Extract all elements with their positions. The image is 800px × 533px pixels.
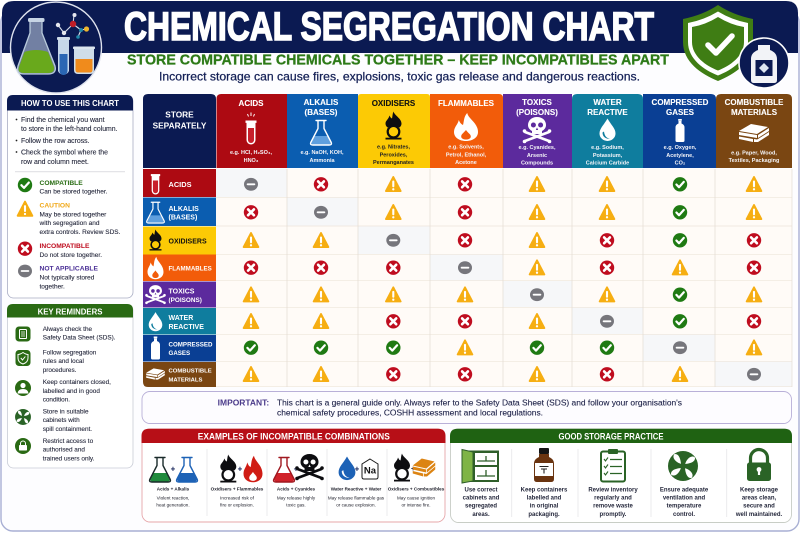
column: acids <box>216 94 287 168</box>
legend: compatible: Can be stored together. <box>40 188 108 196</box>
practice: cabinets: cabinets and <box>463 495 500 501</box>
icon: safety shield and bottle <box>683 5 789 88</box>
column: flammables: Acetone <box>455 160 477 166</box>
column: oxidisers: Permanganates <box>373 160 414 166</box>
instructions: row and column meet. <box>21 159 89 166</box>
column: toxics: Arsenic <box>527 153 547 159</box>
practice: cabinets: Use correct <box>464 487 498 493</box>
row: compressed gases: GASES <box>168 350 190 357</box>
row: water reactive: REACTIVE <box>168 324 204 331</box>
column: alkalis: Ammonia <box>309 158 335 164</box>
example: water reactive and water: or cause explosion. <box>336 502 376 507</box>
example: acids and cyanides <box>274 454 324 507</box>
reminder: keep containers closed: labelled and in good <box>43 388 100 395</box>
example: oxidisers and flammables: Oxidisers + Flammables <box>211 487 264 492</box>
reminder: restrict access: trained users only. <box>43 456 95 462</box>
row: combustible materials <box>143 362 761 387</box>
instructions: Find the chemical you want <box>21 117 105 124</box>
heading: how to use <box>7 95 133 110</box>
legend: not applicable: together. <box>40 284 65 290</box>
column: alkalis: ALKALIS <box>304 98 339 107</box>
practice: labelled containers <box>521 448 568 518</box>
example: oxidisers and combustibles: or intense fire. <box>401 502 431 507</box>
example: oxidisers and combustibles: + <box>411 466 415 473</box>
row: acids: ACIDS <box>168 180 192 189</box>
callout: important note: IMPORTANT: <box>218 397 269 407</box>
column: combustible materials: COMBUSTIBLE <box>725 98 784 107</box>
callout: important note: chemical safety procedures, COSHH assessment and local regulations. <box>277 408 543 417</box>
example: oxidisers and flammables: fire or explosion. <box>220 502 254 507</box>
reminder: segregation rules: rules and local <box>43 358 84 365</box>
matrix background and grid <box>216 169 792 387</box>
row: toxics: (POISONS) <box>168 297 202 304</box>
practice: labelled containers: packaging. <box>528 512 560 518</box>
column: acids: e.g. HCl, H₂SO₄, <box>230 150 272 156</box>
legend: caution: May be stored together <box>40 211 107 218</box>
practice: inventory clipboard: promptly. <box>600 512 627 518</box>
heading: examples: EXAMPLES OF INCOMPATIBLE COMBINATIONS <box>198 432 390 442</box>
panel: examples of incompatible combinations <box>142 429 446 522</box>
reminder: suitable cabinets: spill containment. <box>43 426 92 433</box>
reminder: segregation rules: procedures. <box>43 367 77 374</box>
reminder: keep containers closed <box>15 379 111 404</box>
example: acids and cyanides: + <box>294 464 299 474</box>
example: oxidisers and combustibles: Oxidisers + Combustibles <box>388 487 445 492</box>
reminder: safety data sheet: Always check the <box>43 326 93 333</box>
practice: inventory clipboard: remove waste <box>593 503 634 509</box>
instructions: to store in the left-hand column. <box>21 126 118 133</box>
header band <box>2 1 798 53</box>
row: oxidisers: OXIDISERS <box>168 238 207 245</box>
column: water reactive: Calcium Carbide <box>586 160 629 166</box>
practice: secure storage: secure and <box>743 503 775 509</box>
example: oxidisers and flammables <box>211 454 264 507</box>
callout: important note: This chart is a general guide only. Always refer to the Safety Data Sheet (SDS) and follow your organisation's <box>277 398 682 407</box>
practice: labelled containers: Keep containers <box>521 487 568 493</box>
row: flammables <box>143 254 761 281</box>
column: flammables: e.g. Solvents, <box>448 144 484 150</box>
heading: key reminders: KEY REMINDERS <box>38 308 102 316</box>
column: combustible materials <box>716 94 792 168</box>
practice: labelled containers: in original <box>530 503 559 509</box>
legend: compatible: COMPATIBLE <box>40 180 83 187</box>
example: acids and alkalis <box>150 458 197 507</box>
practice: inventory clipboard: Review inventory <box>588 487 638 493</box>
column: water reactive: WATER <box>593 98 622 107</box>
row: alkalis: ALKALIS <box>168 206 199 213</box>
row: compressed gases: COMPRESSED <box>168 342 213 349</box>
column: toxics: Compounds <box>521 160 553 166</box>
column: compressed gases: Acetylene, <box>666 153 694 159</box>
reminder: suitable cabinets <box>15 408 92 433</box>
reminder: restrict access: authorised and <box>43 446 85 454</box>
row: alkalis: (BASES) <box>168 214 197 222</box>
column: combustible materials: Textiles, Packaging <box>729 158 779 164</box>
column: acids: HNO₃ <box>244 158 259 164</box>
heading: examples <box>142 429 446 443</box>
column: combustible materials: MATERIALS <box>731 108 778 117</box>
example: water reactive and water <box>328 456 385 507</box>
column: compressed gases: e.g. Oxygen, <box>664 145 697 151</box>
practice: ventilation: Ensure adequate <box>660 487 709 493</box>
column: oxidisers <box>358 94 430 168</box>
example: acids and cyanides: Acids + Cyanides <box>277 487 316 492</box>
practice: labelled containers: labelled and <box>527 495 562 501</box>
legend: caution: CAUTION <box>40 202 70 210</box>
example: water reactive and water: Water Reactive + Water <box>331 487 382 492</box>
panel: how to use this chart <box>7 95 133 298</box>
reminder: suitable cabinets: cabinets with <box>43 417 80 424</box>
reminder: keep containers closed: Keep containers closed, <box>43 379 111 386</box>
example: oxidisers and combustibles <box>388 454 445 507</box>
column: combustible materials: e.g. Paper, Wood, <box>731 150 777 156</box>
legend: not applicable: Not typically stored <box>40 274 95 282</box>
row: acids <box>143 169 761 197</box>
tagline: Incorrect storage can cause fires, explosions, toxic gas release and dangerous reactions. <box>159 70 640 84</box>
practice: ventilation: ventilation and <box>663 495 706 501</box>
reminder: restrict access <box>15 438 95 462</box>
column: water reactive: REACTIVE <box>587 108 628 117</box>
practice: secure storage: well maintained. <box>735 512 782 518</box>
reminder: segregation rules: Follow segregation <box>43 350 97 356</box>
column: flammables: Petrol, Ethanol, <box>446 152 487 158</box>
column: toxics: e.g. Cyanides, <box>518 145 556 151</box>
practice: cabinets <box>462 450 500 518</box>
reminder: suitable cabinets: Store in suitable <box>43 408 89 416</box>
practice: secure storage <box>735 450 782 518</box>
reminder: restrict access: Restrict access to <box>43 438 94 445</box>
instructions: Check the symbol where the <box>21 150 108 156</box>
heading: how to use: HOW TO USE THIS CHART <box>21 98 120 108</box>
column: flammables <box>430 94 503 168</box>
practice: cabinets: segregated <box>465 503 497 509</box>
column: alkalis: e.g. NaOH, KOH, <box>300 150 344 156</box>
example: acids and alkalis: Violent reaction, <box>157 495 189 500</box>
legend: caution: with segregation and <box>38 220 100 227</box>
panel: good storage practice <box>450 429 792 522</box>
example: acids and cyanides: May release highly <box>277 495 316 500</box>
example: acids and alkalis: heat generation. <box>156 502 190 507</box>
heading: key reminders <box>7 304 133 318</box>
column: alkalis: (BASES) <box>305 108 338 117</box>
practice: cabinets: areas. <box>472 512 490 518</box>
legend: incompatible: Do not store together. <box>40 252 102 259</box>
subtitle: STORE COMPATIBLE CHEMICALS TOGETHER – KEEP INCOMPATIBLES APART <box>127 52 669 68</box>
column: toxics: TOXICS <box>522 98 552 107</box>
column: oxidisers: e.g. Nitrates, <box>377 144 410 150</box>
example: water reactive and water: + <box>355 464 360 474</box>
callout: important note <box>142 392 792 424</box>
heading: good storage: GOOD STORAGE PRACTICE <box>558 432 664 442</box>
column: toxics <box>503 94 572 168</box>
practice: secure storage: Keep storage <box>740 487 779 493</box>
practice: secure storage: areas clean, <box>742 495 777 501</box>
panel: key reminders <box>7 304 133 468</box>
row: oxidisers <box>143 226 761 254</box>
column: water reactive <box>572 94 643 168</box>
legend: compatible <box>18 178 108 196</box>
row: compressed gases <box>143 335 761 362</box>
column: oxidisers: OXIDISERS <box>372 99 416 108</box>
title: CHEMICAL SEGREGATION CHART <box>124 5 654 49</box>
reminder: segregation rules <box>16 350 97 374</box>
legend: not applicable <box>18 265 98 290</box>
example: acids and alkalis: Acids + Alkalis <box>157 487 190 492</box>
column: compressed gases: COMPRESSED <box>652 98 709 107</box>
legend: not applicable: NOT APPLICABLE <box>40 266 98 272</box>
column: oxidisers: Peroxides, <box>380 152 408 158</box>
header: store separately <box>143 94 216 168</box>
column: compressed gases <box>643 94 716 168</box>
column: flammables: FLAMMABLES <box>438 99 495 108</box>
example: oxidisers and combustibles: May cause ignition <box>397 495 435 500</box>
row: toxics <box>143 282 761 308</box>
row: flammables: FLAMMABLES <box>168 266 212 273</box>
column: compressed gases: GASES <box>666 108 695 117</box>
practice: ventilation: temperature <box>667 503 702 509</box>
example: water reactive and water: Na <box>364 466 377 476</box>
practice: inventory clipboard: regularly and <box>594 495 632 501</box>
row: water reactive <box>143 308 761 334</box>
legend: caution: extra controls. Review SDS. <box>40 229 121 236</box>
header: store separately: SEPARATELY <box>153 120 207 130</box>
practice: inventory clipboard <box>588 449 638 518</box>
practice: ventilation <box>660 451 709 518</box>
header: store separately: STORE <box>165 110 194 120</box>
instructions <box>16 117 118 166</box>
column: compressed gases: CO₂ <box>675 160 686 166</box>
chart: segregation matrix <box>143 94 792 387</box>
reminder: safety data sheet <box>16 326 116 342</box>
column: toxics: (POISONS) <box>516 108 558 117</box>
reminder: safety data sheet: Safety Data Sheet (SDS). <box>43 334 116 342</box>
example: acids and cyanides: toxic gas. <box>286 502 306 507</box>
row: combustible materials: COMBUSTIBLE <box>168 369 212 375</box>
practice: ventilation: control. <box>673 512 695 518</box>
icon: laboratory glassware logo <box>10 2 102 93</box>
row: water reactive: WATER <box>168 315 193 322</box>
legend: caution <box>18 202 121 236</box>
example: oxidisers and flammables: Increased risk of <box>220 495 255 500</box>
example: water reactive and water: May release flammable gas <box>328 495 385 500</box>
example: oxidisers and flammables: + <box>238 464 243 474</box>
legend: incompatible <box>18 242 102 259</box>
column: water reactive: e.g. Sodium, <box>591 145 624 151</box>
column: water reactive: Potassium, <box>593 153 623 159</box>
reminder: keep containers closed: condition. <box>43 396 70 404</box>
column: acids: ACIDS <box>239 99 264 108</box>
column: alkalis <box>287 94 358 168</box>
example: acids and alkalis: + <box>171 464 176 474</box>
legend: incompatible: INCOMPATIBLE <box>40 243 90 250</box>
instructions: Follow the row across. <box>21 138 90 145</box>
heading: good storage <box>450 429 792 443</box>
row: toxics: TOXICS <box>168 288 195 295</box>
row: combustible materials: MATERIALS <box>168 377 202 383</box>
row: alkalis <box>143 198 761 226</box>
